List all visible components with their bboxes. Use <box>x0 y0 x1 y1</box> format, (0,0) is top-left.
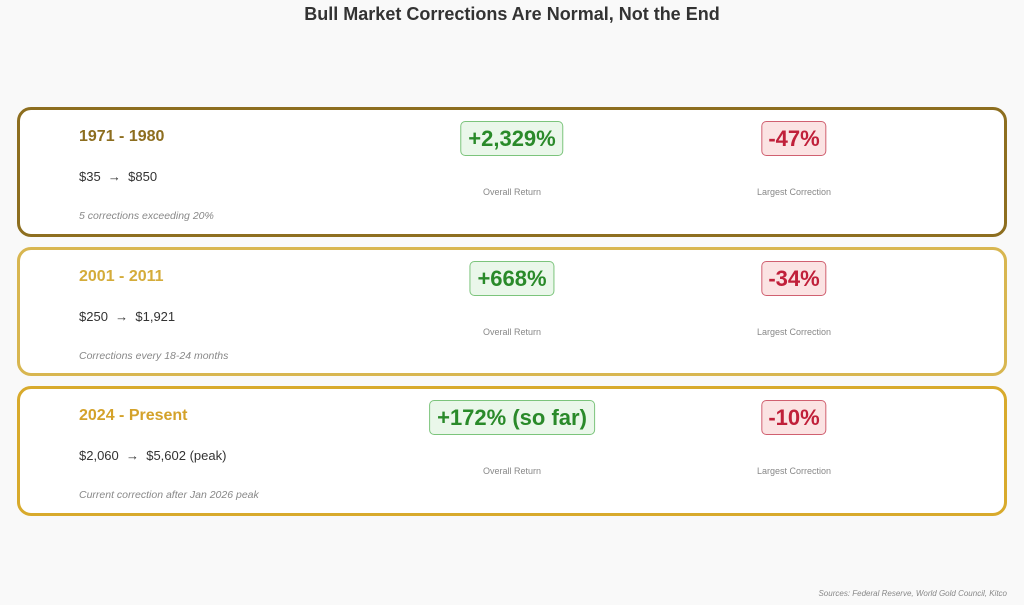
overall return <box>469 261 555 296</box>
largest correction: -47% <box>768 126 820 151</box>
sources: Sources: Federal Reserve, World Gold Council, Kitco <box>818 589 1007 598</box>
label: Largest Correction <box>757 187 831 197</box>
title: Bull Market Corrections Are Normal, Not the End <box>304 4 720 24</box>
panel: 2001-2011 <box>17 247 1007 376</box>
heading: 1971 - 1980 <box>79 128 164 145</box>
note: Current correction after Jan 2026 peak <box>79 489 259 501</box>
largest correction <box>761 121 827 156</box>
label: Overall Return <box>483 187 541 197</box>
price: $250 → $1,921 <box>79 309 175 324</box>
note: 5 corrections exceeding 20% <box>79 210 214 222</box>
largest correction: -10% <box>768 405 820 430</box>
overall return <box>429 400 595 435</box>
panel: 1971-1980 <box>17 107 1007 237</box>
heading: 2001 - 2011 <box>79 268 164 285</box>
largest correction <box>761 400 827 435</box>
panel: 2024-Present <box>17 386 1007 516</box>
largest correction <box>761 261 827 296</box>
overall return: +2,329% <box>468 126 556 151</box>
largest correction: -34% <box>768 266 820 291</box>
price: $35 → $850 <box>79 169 157 184</box>
heading: 2024 - Present <box>79 407 188 424</box>
label: Largest Correction <box>757 466 831 476</box>
label: Overall Return <box>483 466 541 476</box>
price: $2,060 → $5,602 (peak) <box>79 448 226 463</box>
overall return: +668% <box>477 266 547 291</box>
overall return <box>460 121 564 156</box>
label: Largest Correction <box>757 327 831 337</box>
label: Overall Return <box>483 327 541 337</box>
note: Corrections every 18-24 months <box>79 350 228 362</box>
overall return: +172% (so far) <box>437 405 587 430</box>
